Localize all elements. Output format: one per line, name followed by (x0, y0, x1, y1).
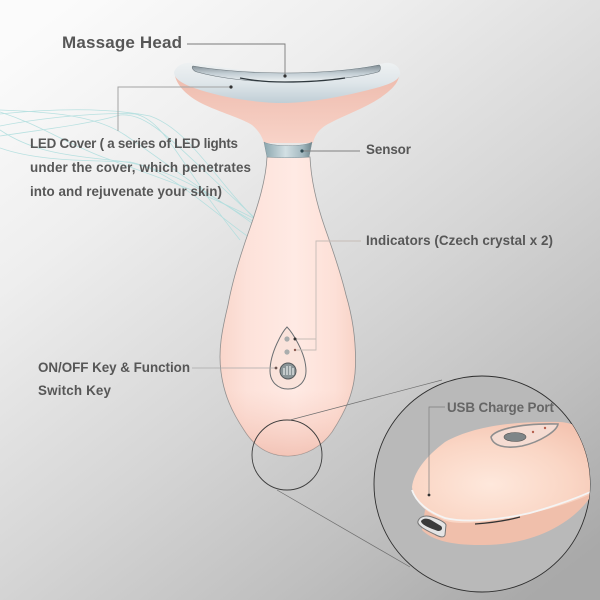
callout: LED cover (30, 85, 251, 199)
magnified control panel (491, 424, 558, 447)
callout: sensor: Sensor (366, 142, 412, 157)
callout: massage head: Massage Head (62, 33, 182, 52)
zoom connector lines (277, 380, 442, 567)
sensor collar (264, 142, 312, 158)
callout: on/off key (38, 360, 277, 398)
callout: indicators: Indicators (Czech crystal x 2) (366, 233, 553, 248)
device: neck massager (174, 63, 400, 456)
callout: LED cover: under the cover, which penetrates (30, 160, 251, 175)
magnified top surface (412, 422, 600, 523)
callout: sensor (300, 142, 412, 157)
massage head metal plate (192, 65, 380, 82)
silver edge (412, 490, 595, 520)
callout: on/off key: ON/OFF Key & Function (38, 360, 190, 375)
head pink underside (175, 76, 399, 143)
callout: on/off key: Switch Key (38, 383, 112, 398)
USB label leader (429, 407, 445, 495)
decorative teal waves (0, 110, 258, 240)
callout: indicators (294, 233, 553, 351)
callout: LED cover: LED Cover ( a series of LED lights (30, 136, 238, 151)
magnified underside (422, 480, 595, 545)
callout: LED cover: into and rejuvenate your skin) (30, 184, 222, 199)
USB label: USB Charge Port (447, 400, 555, 415)
device body (220, 157, 356, 456)
callout: massage head (62, 33, 287, 78)
LED cover (174, 63, 400, 103)
USB port (418, 516, 446, 537)
control panel teardrop (270, 327, 306, 389)
magnified panel: USB charge port (374, 376, 600, 592)
zoom circle on device base (252, 420, 322, 490)
